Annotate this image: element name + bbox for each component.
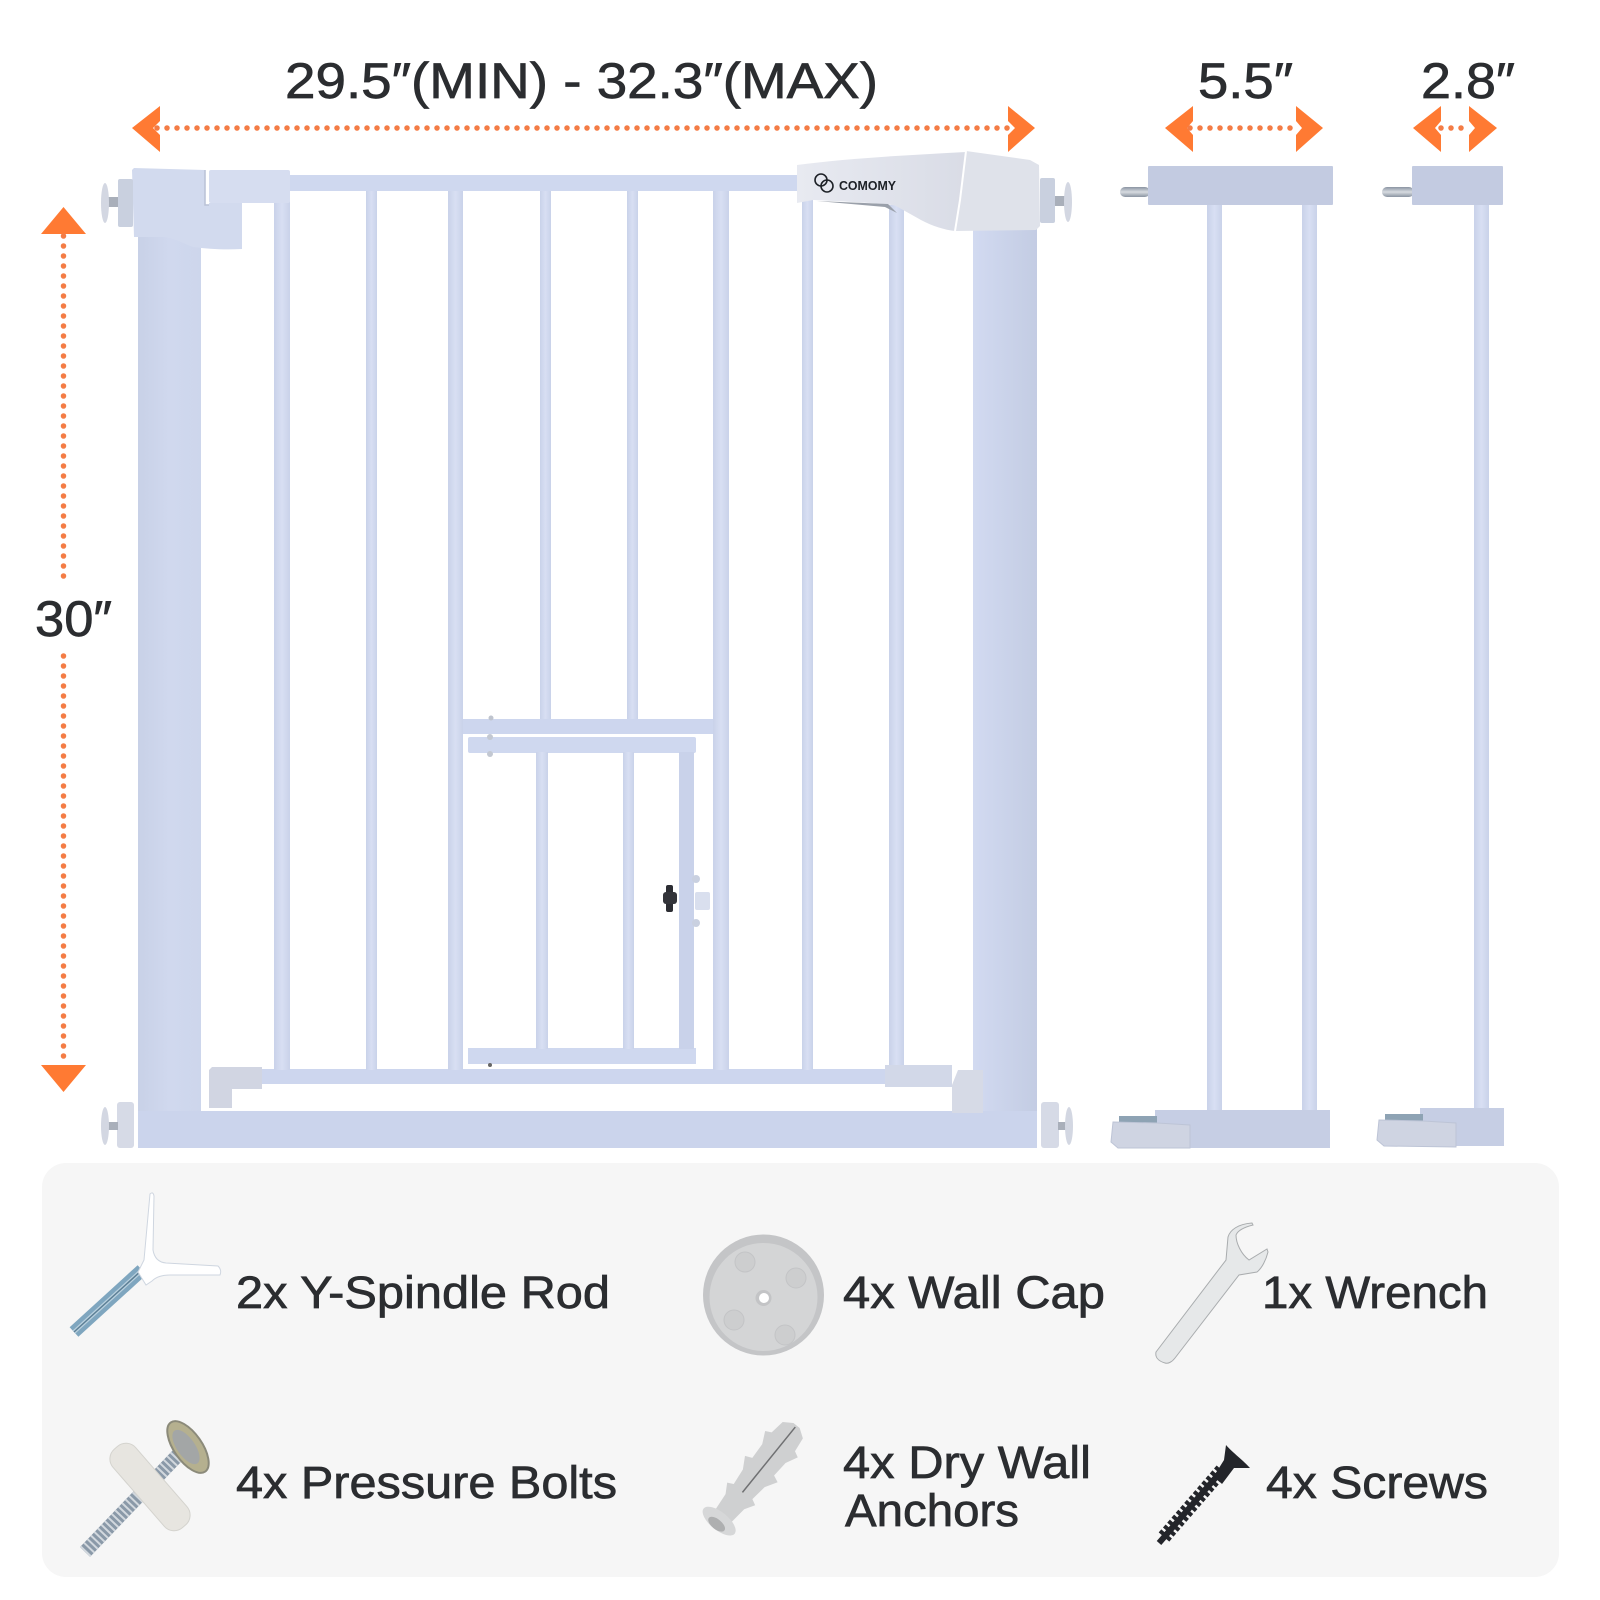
lower left bracket bbox=[209, 1067, 262, 1108]
pet door bbox=[468, 716, 696, 1067]
lower rail bbox=[262, 1069, 887, 1084]
top left hinge bracket bbox=[132, 168, 290, 249]
label: dry wall anchors: 4x Dry Wall bbox=[843, 1437, 1091, 1488]
extension: 5.5 inch bbox=[1111, 166, 1333, 1148]
dimension: gate width bbox=[132, 53, 1035, 152]
label: wall cap: 4x Wall Cap bbox=[843, 1267, 1105, 1318]
pressure knob: top right bbox=[1040, 178, 1072, 223]
label: pressure bolts: 4x Pressure Bolts bbox=[236, 1457, 617, 1508]
right post bbox=[973, 215, 1037, 1148]
label: wrench: 1x Wrench bbox=[1262, 1267, 1488, 1318]
extension: 2.8 inch bbox=[1377, 166, 1504, 1147]
pressure knob: bottom left bbox=[101, 1102, 134, 1148]
floor lever bbox=[952, 1070, 983, 1113]
arrow: gate width bbox=[132, 106, 1035, 152]
label: 2.8 inch: 2.8″ bbox=[1421, 53, 1515, 109]
icon: pressure bolt bbox=[85, 1414, 217, 1552]
label: 30 inch: 30″ bbox=[35, 591, 112, 647]
dimension: gate height bbox=[35, 207, 112, 1092]
icon: wall cap bbox=[703, 1234, 824, 1356]
bottom rail bbox=[138, 1111, 1037, 1148]
icon: screw bbox=[1159, 1445, 1250, 1543]
panel: included hardware bbox=[42, 1163, 1559, 1577]
lower right bracket bbox=[885, 1065, 952, 1087]
vertical bars bbox=[274, 185, 904, 1070]
label: 5.5 inch: 5.5″ bbox=[1198, 53, 1293, 109]
arrow: 5.5 inch width bbox=[1165, 106, 1323, 152]
arrow: 2.8 inch width bbox=[1413, 106, 1497, 152]
logo: Comomy bbox=[815, 174, 896, 193]
icon: Y-spindle rod bbox=[74, 1193, 221, 1332]
label: dry wall anchors bbox=[843, 1437, 1091, 1536]
label: screws: 4x Screws bbox=[1266, 1457, 1488, 1508]
logo: Comomy: COMOMY bbox=[839, 178, 896, 193]
icon: dry wall anchor bbox=[697, 1412, 813, 1541]
door header rail bbox=[463, 719, 713, 734]
label: Y-spindle rod: 2x Y-Spindle Rod bbox=[236, 1267, 610, 1318]
pressure knob: top left bbox=[101, 179, 133, 227]
gate: main frame bbox=[101, 151, 1073, 1148]
dimension: 2.8 inch extension bbox=[1413, 53, 1515, 152]
top rail bbox=[285, 175, 805, 191]
door latch knob bbox=[663, 875, 710, 927]
pressure knob: bottom right bbox=[1041, 1102, 1073, 1148]
top right handle with logo bbox=[797, 151, 1040, 231]
left post bbox=[138, 230, 201, 1148]
arrow: gate height bbox=[41, 207, 86, 1092]
icon: wrench bbox=[1156, 1223, 1268, 1363]
label: dry wall anchors: Anchors bbox=[845, 1485, 1019, 1536]
dimension: 5.5 inch extension bbox=[1165, 53, 1323, 152]
label: gate width: 29.5″(MIN) - 32.3″(MAX) bbox=[285, 53, 878, 109]
